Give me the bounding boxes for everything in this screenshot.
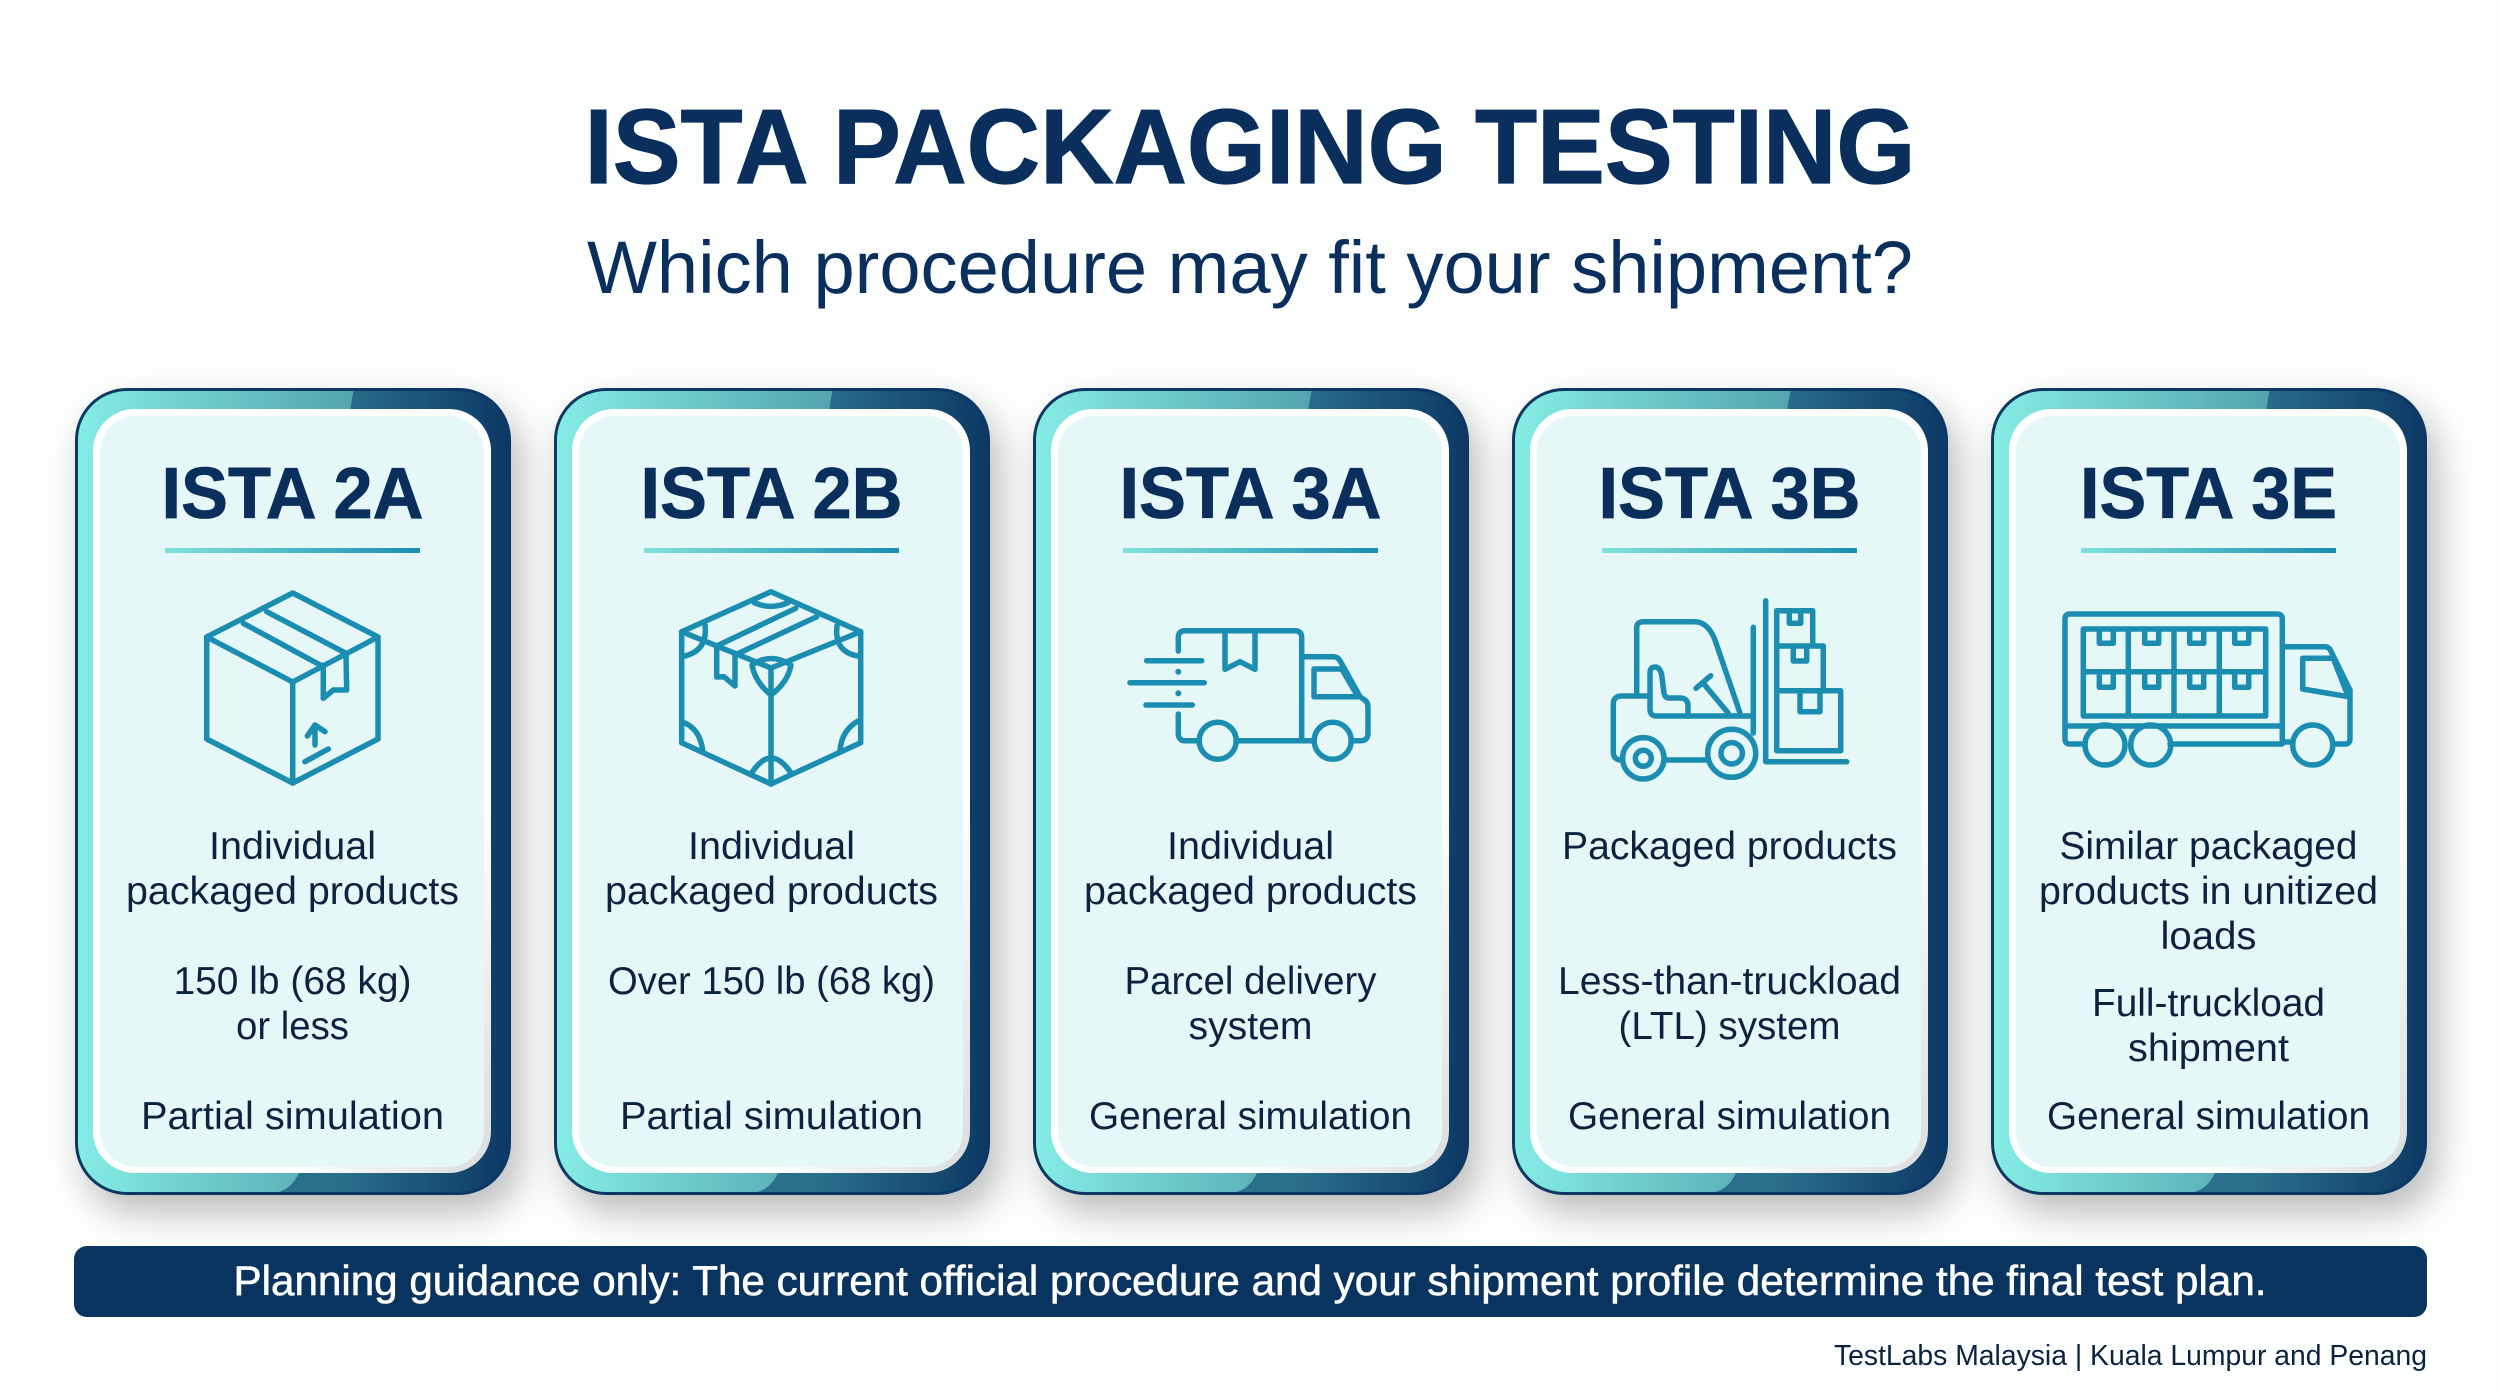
text: distribution system: (LTL) system	[1618, 1005, 1840, 1048]
icon: delivery van	[1130, 631, 1368, 759]
text: product type: Packaged products	[1562, 825, 1897, 868]
text: distribution system: shipment	[2128, 1027, 2289, 1070]
icon: forklift with boxes	[1613, 601, 1847, 779]
panel: ISTA 3A	[1018, 380, 1469, 1195]
footer credit: TestLabs Malaysia | Kuala Lumpur and Penang	[1834, 1340, 2427, 1372]
text: distribution system: Less-than-truckload	[1558, 960, 1901, 1003]
subtitle: Which procedure may fit your shipment?	[587, 226, 1913, 309]
banner: planning guidance: Planning guidance only: The current official procedure and your shipment profile determine the final test plan.	[234, 1257, 2266, 1304]
text: simulation: General simulation	[1568, 1095, 1891, 1138]
text: simulation: General simulation	[1089, 1095, 1412, 1138]
heading: ISTA 2A: ISTA 2A	[162, 454, 424, 534]
text: product type: loads	[2160, 915, 2256, 958]
text: weight: 150 lb (68 kg)	[174, 960, 412, 1003]
icon: box with protected corners	[682, 592, 861, 784]
text: product type	[126, 825, 459, 913]
text: product type: Individual	[209, 825, 376, 868]
panel: ISTA 3E	[1976, 380, 2427, 1195]
heading: ISTA 3A: ISTA 3A	[1120, 454, 1382, 534]
panel: ISTA 3B	[1497, 380, 1948, 1195]
text: weight: or less	[236, 1005, 349, 1048]
banner: planning guidance	[74, 1246, 2427, 1317]
panel: ISTA 2A	[60, 380, 511, 1195]
text: product type	[605, 825, 938, 913]
text: product type: Individual	[1167, 825, 1334, 868]
text: product type	[2039, 825, 2378, 958]
text: product type	[1084, 825, 1417, 913]
text: product type: packaged products	[605, 870, 938, 913]
icon: sealed box	[207, 593, 378, 783]
text: product type: Individual	[688, 825, 855, 868]
text: product type: packaged products	[1084, 870, 1417, 913]
text: simulation: Partial simulation	[620, 1095, 923, 1138]
panel: ISTA 2B	[539, 380, 990, 1195]
text: weight: Over 150 lb (68 kg)	[608, 960, 935, 1003]
text: distribution system	[2092, 982, 2325, 1070]
text: product type: packaged products	[126, 870, 459, 913]
text: product type: Similar packaged	[2060, 825, 2358, 868]
text: product type: products in unitized	[2039, 870, 2378, 913]
heading: ISTA 3E: ISTA 3E	[2080, 454, 2337, 534]
text: distribution system	[1124, 960, 1377, 1048]
text: simulation: General simulation	[2047, 1095, 2370, 1138]
text: simulation: Partial simulation	[141, 1095, 444, 1138]
text: distribution system: Parcel delivery	[1124, 960, 1377, 1003]
heading: ISTA 3B: ISTA 3B	[1598, 454, 1860, 534]
text: distribution system	[1558, 960, 1901, 1048]
text: weight	[174, 960, 412, 1048]
text: distribution system: system	[1188, 1005, 1312, 1048]
title: ISTA PACKAGING TESTING	[584, 88, 1916, 206]
heading: ISTA 2B: ISTA 2B	[640, 454, 902, 534]
text: distribution system: Full-truckload	[2092, 982, 2325, 1025]
icon: full truck with unitized load	[2065, 614, 2350, 765]
